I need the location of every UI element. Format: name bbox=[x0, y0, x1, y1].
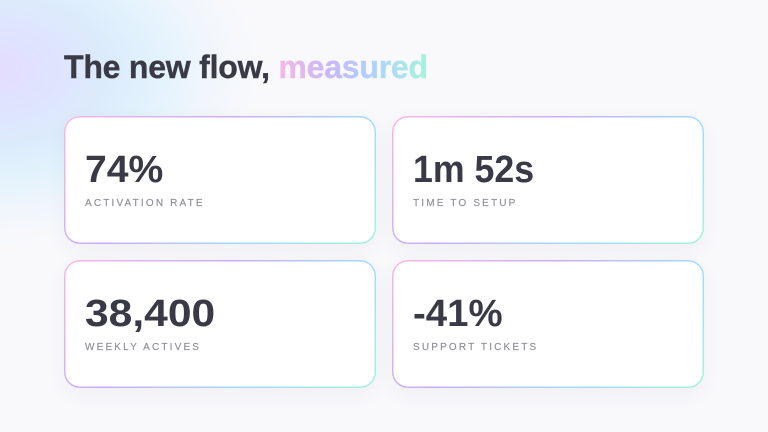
value: 74%: 74% bbox=[85, 149, 163, 191]
label: support tickets: SUPPORT TICKETS bbox=[413, 342, 538, 352]
label: activation rate: ACTIVATION RATE bbox=[85, 198, 205, 208]
title: The new flow, measured bbox=[64, 49, 428, 85]
value: -41%: -41% bbox=[413, 293, 503, 335]
label: weekly actives: WEEKLY ACTIVES bbox=[85, 342, 201, 352]
panel: time to setup bbox=[392, 116, 704, 244]
value: 38,400: 38,400 bbox=[85, 293, 215, 335]
value: 1m 52s: 1m 52s bbox=[413, 149, 534, 191]
panel: weekly actives bbox=[64, 260, 376, 388]
panel: activation rate bbox=[64, 116, 376, 244]
label: time to setup: TIME TO SETUP bbox=[413, 198, 518, 208]
panel: support tickets bbox=[392, 260, 704, 388]
